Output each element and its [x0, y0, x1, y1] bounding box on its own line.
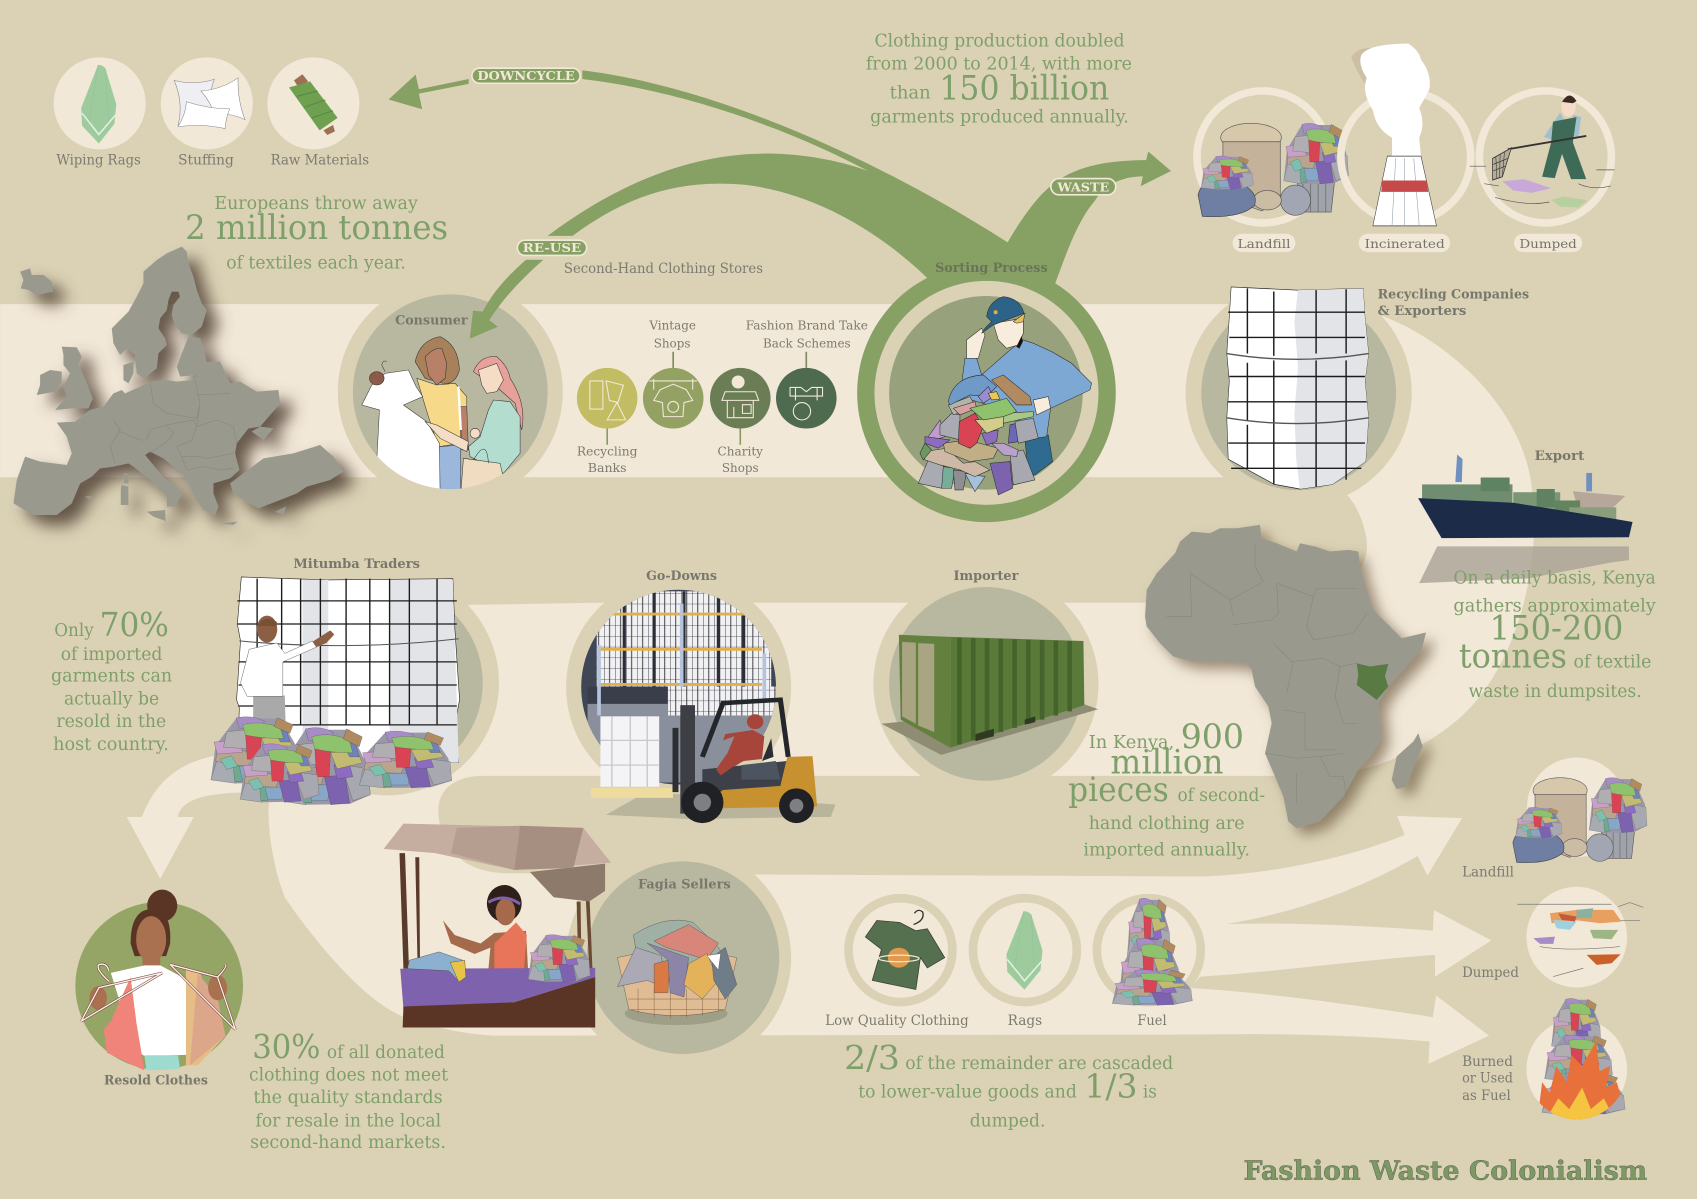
stat: Kenya daily textile waste: waste in dumpsites.: [1469, 682, 1642, 702]
labels: second-hand store types: [577, 318, 868, 475]
icon: vintage shops: [643, 368, 703, 429]
stat: Europeans throw away 2 million tonnes: of textiles each year.: [226, 253, 406, 273]
labels: second-hand store types: Back Schemes: [763, 335, 851, 350]
circle: stuffing pillows: [161, 57, 253, 149]
stat: 900 million pieces imported in Kenya: of second-: [1177, 786, 1265, 806]
stat: Kenya daily textile waste: 150-200: [1490, 609, 1623, 648]
label pill: downcycle: DOWNCYCLE: [477, 69, 575, 83]
headings: mitumba, go-downs, importer, fagia: [293, 557, 1019, 892]
illustration: two women with garment: [362, 337, 523, 493]
stat: Kenya daily textile waste: gathers approximately: [1453, 596, 1656, 616]
labels: lower-value goods: Rags: [1008, 1013, 1042, 1029]
stat: two thirds cascaded, one third dumped: dumped.: [970, 1111, 1045, 1131]
stat: 30 percent does not meet standards: the quality standards: [253, 1088, 443, 1108]
labels: lower-value goods: [825, 1013, 1167, 1029]
stat: two thirds cascaded, one third dumped: 2/3: [844, 1039, 900, 1077]
map: Africa with Kenya highlighted: [1145, 525, 1426, 828]
stat: 30 percent does not meet standards: of all donated: [327, 1043, 445, 1063]
label: dumped: Dumped: [1462, 965, 1519, 981]
stat: only 70 percent resold: [51, 606, 172, 755]
stat: two thirds cascaded, one third dumped: of the remainder are cascaded: [905, 1054, 1173, 1074]
stat: 900 million pieces imported in Kenya: hand clothing are: [1089, 814, 1245, 834]
circle: sorting process ring: [857, 263, 1116, 522]
map: Europe: [13, 247, 343, 525]
stat: two thirds cascaded, one third dumped: [844, 1039, 1173, 1131]
label: recycling companies and exporters: [1378, 288, 1529, 319]
stat: 900 million pieces imported in Kenya: In Kenya,: [1089, 733, 1174, 753]
stat: Kenya daily textile waste: tonnes: [1459, 637, 1567, 676]
labels: second-hand store types: Recycling: [577, 444, 638, 459]
illustration: market stall with seller: [384, 824, 611, 1028]
stat: clothing production doubled: garments produced annually.: [870, 107, 1129, 127]
illustration: person netting dumped clothes: [1470, 91, 1614, 223]
stat: only 70 percent resold: actually be: [64, 689, 159, 709]
stat: clothing production doubled: than: [890, 83, 931, 103]
icon: charity shops: [710, 368, 771, 429]
illustration: warehouse interior: [588, 591, 780, 783]
label: consumer: Consumer: [395, 314, 468, 329]
stat: two thirds cascaded, one third dumped: to lower-value goods and: [858, 1082, 1077, 1102]
labels: lower-value goods: Fuel: [1137, 1013, 1167, 1029]
stat: 900 million pieces imported in Kenya: 900: [1181, 717, 1244, 756]
stat: 900 million pieces imported in Kenya: million: [1110, 743, 1223, 782]
icon row: second-hand stores: [577, 352, 837, 445]
arrow: cream arrow from Mitumba Traders to Resold Clothes: [127, 752, 260, 879]
stat: 30 percent does not meet standards: for resale in the local: [255, 1111, 442, 1131]
stat: only 70 percent resold: 70%: [100, 606, 169, 644]
headings: mitumba, go-downs, importer, fagia: Go-Downs: [646, 569, 717, 584]
icon: low quality t-shirt: [848, 898, 952, 1002]
illustration: worker sorting a pile of clothes: [918, 297, 1092, 495]
labels: second-hand store types: Banks: [588, 460, 627, 475]
label: landfill: Landfill: [1462, 865, 1514, 881]
arrow: re-use head toward consumer: [470, 260, 543, 339]
stat: 900 million pieces imported in Kenya: [1068, 717, 1265, 860]
illustration: incinerator tower with smoke: [1341, 44, 1471, 226]
label: burned or used as fuel: or Used: [1462, 1071, 1513, 1087]
label pill: waste: WASTE: [1056, 181, 1109, 195]
Kenya: [1357, 663, 1388, 700]
top labels: downcycling products: Stuffing: [178, 152, 234, 168]
stat: Europeans throw away 2 million tonnes: Europeans throw away: [214, 194, 418, 214]
stat: Kenya daily textile waste: of textile: [1574, 653, 1651, 673]
label: export: Export: [1535, 449, 1584, 464]
top labels: downcycling products: [56, 152, 369, 168]
labels: second-hand store types: Shops: [722, 460, 759, 475]
illustration: woman holding clothes on hangers: [75, 890, 243, 1070]
icon: fuel stack: [1097, 898, 1201, 1005]
illustration: stacked textile bales: [1227, 287, 1369, 489]
icon: rags: [973, 898, 1077, 1002]
stat: only 70 percent resold: Only: [54, 621, 94, 641]
waste destination labels: Dumped: [1519, 236, 1577, 251]
label pill: re-use: RE-USE: [523, 241, 581, 255]
labels: second-hand store types: Shops: [654, 335, 691, 350]
illustration: green shipping container: [881, 635, 1098, 755]
label: burned or used as fuel: Burned: [1462, 1054, 1513, 1070]
arrow: downcycle head: [389, 75, 469, 109]
labels: second-hand store types: Vintage: [648, 318, 696, 333]
stat: clothing production doubled: [866, 32, 1132, 127]
waste destination labels: [1233, 234, 1582, 252]
circle: wiping rags: [54, 57, 146, 149]
top labels: downcycling products: Wiping Rags: [56, 152, 141, 168]
label: recycling companies and exporters: & Exporters: [1378, 304, 1466, 319]
label: burned or used as fuel: [1462, 1054, 1513, 1104]
labels: second-hand store types: Charity: [718, 444, 763, 459]
circle: fagia sellers: [566, 845, 791, 1070]
label: resold clothes: Resold Clothes: [104, 1073, 208, 1088]
stat: only 70 percent resold: of imported: [61, 645, 162, 665]
stat: 30 percent does not meet standards: 30%: [252, 1028, 320, 1066]
illustration: dumped clothes field: [1517, 887, 1643, 987]
text: second-hand clothing stores heading: Second-Hand Clothing Stores: [564, 261, 763, 277]
waste destination labels: Incinerated: [1365, 236, 1445, 251]
label: sorting process: Sorting Process: [935, 261, 1048, 276]
stat: two thirds cascaded, one third dumped: is: [1143, 1082, 1157, 1102]
illustration: right landfill: [1513, 757, 1647, 863]
headings: mitumba, go-downs, importer, fagia: Importer: [953, 569, 1019, 584]
label: burned or used as fuel: as Fuel: [1462, 1088, 1511, 1104]
illustration: burning clothes pile: [1526, 998, 1629, 1125]
stat: 900 million pieces imported in Kenya: pieces: [1068, 770, 1169, 809]
flow band: cream path through the supply chain: [0, 304, 1534, 1064]
stat: 900 million pieces imported in Kenya: imported annually.: [1083, 840, 1250, 860]
stat: 30 percent does not meet standards: [249, 1028, 448, 1153]
title: Fashion Waste Colonialism: [1243, 1157, 1647, 1187]
stat: Europeans throw away 2 million tonnes: [185, 194, 448, 273]
label pill: waste: [1051, 179, 1116, 195]
illustration: landfill ring: [1197, 91, 1349, 223]
stat: clothing production doubled: Clothing production doubled: [874, 32, 1124, 52]
icon: fashion brand take-back: [776, 368, 837, 429]
stat: 30 percent does not meet standards: clothing does not meet: [249, 1066, 448, 1086]
top labels: downcycling products: Raw Materials: [271, 152, 369, 168]
circle: go-downs: [566, 575, 791, 800]
stat: clothing production doubled: 150 billion: [939, 69, 1109, 108]
headings: mitumba, go-downs, importer, fagia: Mitumba Traders: [293, 557, 420, 572]
flow arrows: downcycle, re-use and waste from the sorting process: [548, 70, 1171, 284]
illustration: trader with bales and clothes: [211, 577, 460, 805]
label: recycling companies and exporters: Recycling Companies: [1378, 288, 1529, 303]
circle: mitumba traders: [274, 570, 499, 795]
labels: lower-value goods: Low Quality Clothing: [825, 1013, 969, 1029]
illustration: laundry basket of clothes: [617, 920, 737, 1025]
stat: Europeans throw away 2 million tonnes: 2 million tonnes: [185, 208, 448, 247]
circle: consumer: [338, 279, 563, 504]
stat: 30 percent does not meet standards: second-hand markets.: [250, 1133, 446, 1153]
stat: Kenya daily textile waste: On a daily basis, Kenya: [1453, 568, 1656, 588]
labels: second-hand store types: Fashion Brand Take: [746, 318, 868, 333]
circle: recycling companies: [1186, 280, 1412, 506]
stat: two thirds cascaded, one third dumped: 1/3: [1084, 1067, 1137, 1105]
illustration: container ship with reflection: [1418, 455, 1633, 583]
icon: recycling banks: [577, 368, 637, 429]
stat: only 70 percent resold: host country.: [53, 735, 169, 755]
stat: only 70 percent resold: resold in the: [56, 712, 166, 732]
circle: raw materials spool: [267, 57, 359, 149]
stat: clothing production doubled: from 2000 to 2014, with more: [866, 54, 1132, 74]
label pill: re-use: [517, 240, 587, 255]
illustration: forklift with pallet: [591, 700, 835, 823]
headings: mitumba, go-downs, importer, fagia: Fagia Sellers: [638, 877, 731, 892]
stat: Kenya daily textile waste: [1453, 568, 1656, 702]
stat: only 70 percent resold: garments can: [51, 667, 172, 687]
waste destination labels: Landfill: [1238, 236, 1291, 251]
circle: importer: [873, 571, 1098, 796]
